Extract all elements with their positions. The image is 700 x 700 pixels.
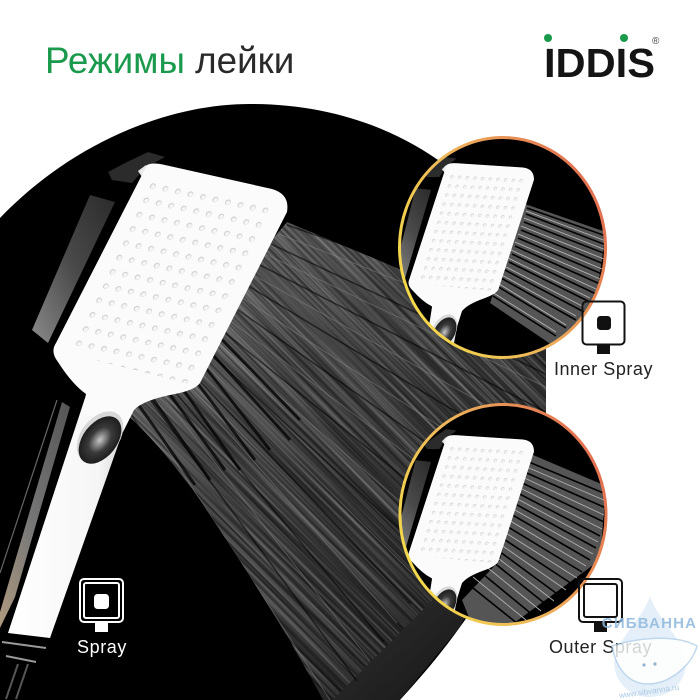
- label: spray: Spray: [77, 637, 127, 657]
- hose connector: [2, 642, 46, 699]
- icon: inner spray: [582, 302, 624, 354]
- title: Режимы лейки: [45, 40, 294, 81]
- logo: IDDIS: ®: [652, 36, 660, 47]
- main water spray: [130, 222, 546, 700]
- shower head, main view: [0, 152, 287, 638]
- inset: outer spray: [398, 403, 608, 626]
- icon: outer spray: [579, 579, 622, 632]
- watermark: sibvanna: [602, 596, 697, 700]
- icon: spray: [80, 579, 123, 632]
- inset: inner spray: [398, 136, 607, 359]
- label: outer spray: Outer Spray: [549, 637, 652, 657]
- background panel: black circle: [0, 104, 546, 700]
- label: inner spray: Inner Spray: [554, 359, 653, 379]
- watermark: sibvanna: www.sibvanna.ru: [618, 683, 680, 700]
- watermark: sibvanna: СИБВАННА: [602, 615, 697, 632]
- logo: IDDIS: IDDIS: [544, 40, 655, 86]
